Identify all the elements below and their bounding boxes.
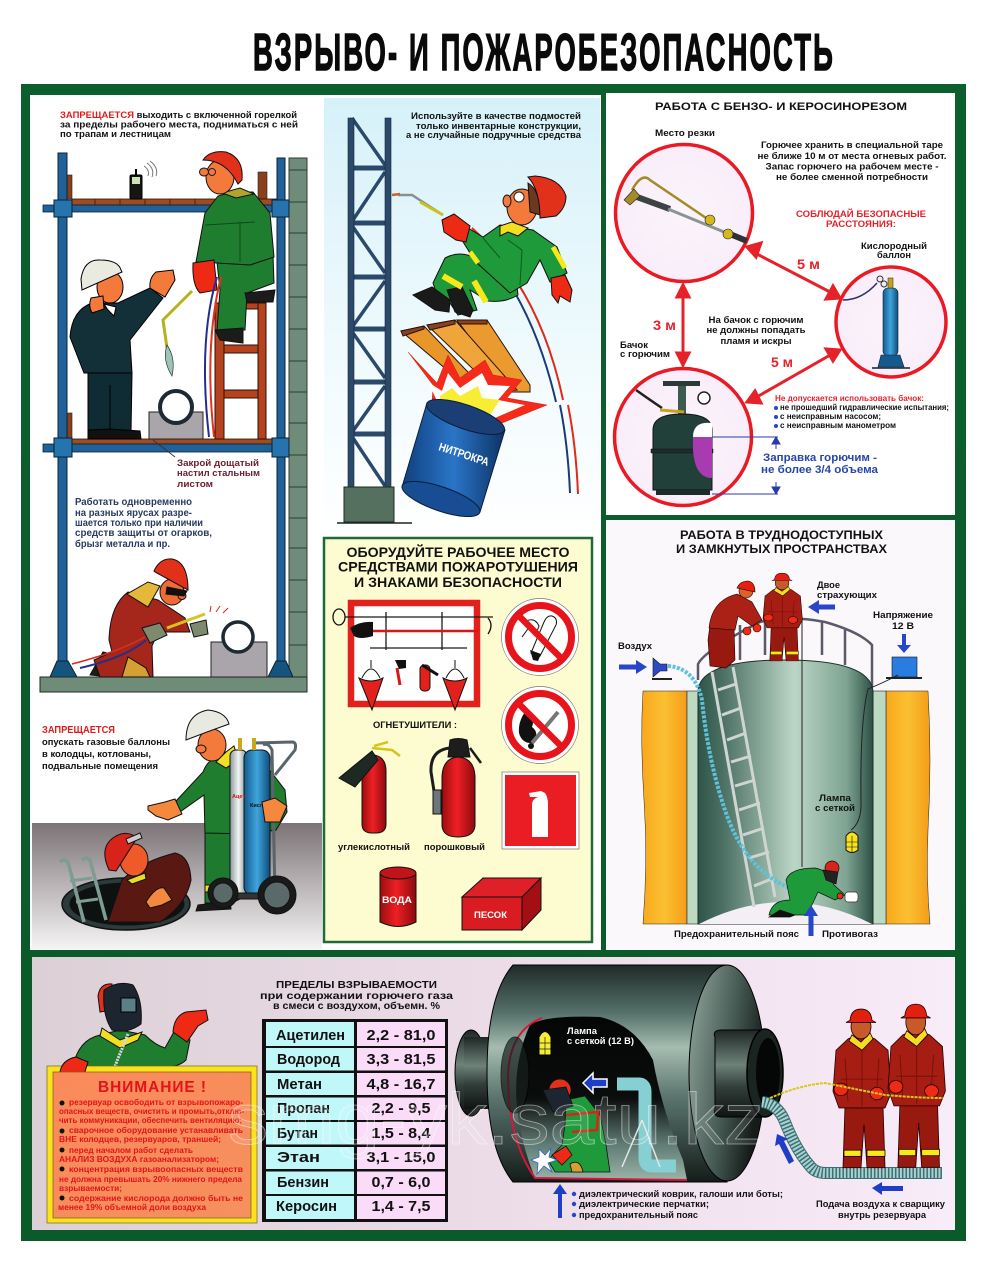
lattice tower bbox=[337, 118, 412, 523]
deck note: листом bbox=[177, 479, 213, 490]
label: fuel tank: с горючим bbox=[620, 349, 670, 359]
text: fuel storage: Запас горючего на рабочем месте - bbox=[766, 162, 938, 172]
horizontal tank bbox=[455, 965, 783, 1182]
lamp with grid bbox=[846, 832, 858, 852]
watermark: smg-yk.satu.kz bbox=[228, 1080, 764, 1160]
heading: РАБОТА В ТРУДНОДОСТУПНЫХ bbox=[680, 530, 883, 542]
label: air supply: внутрь резервуара bbox=[838, 1210, 927, 1220]
deck note bbox=[153, 440, 260, 490]
text: forbidden torch: ЗАПРЕЩАЕТСЯ выходить с включенной горелкой bbox=[60, 110, 297, 121]
block with pipe, kneeling bbox=[211, 622, 267, 677]
label: oxygen cylinder bbox=[861, 241, 927, 261]
two safety workers bbox=[708, 573, 802, 668]
PPE list bbox=[572, 1189, 783, 1220]
forbidden list bbox=[774, 394, 949, 430]
sign: fire extinguisher bbox=[502, 772, 579, 849]
labels: Воздух bbox=[618, 641, 652, 651]
air duct bbox=[762, 1102, 942, 1173]
text: fuel storage: не ближе 10 м от места огневых работ. bbox=[758, 151, 946, 162]
table: explosive limits: 1,4 - 7,5 bbox=[372, 1198, 430, 1215]
rope right worker bbox=[888, 1004, 945, 1167]
labels: Двое bbox=[817, 580, 840, 590]
label: lamp in tank bbox=[567, 1026, 634, 1046]
text: flames and sparks: пламя и искры bbox=[720, 336, 792, 347]
heading: И ЗАМКНУТЫХ ПРОСТРАНСТВАХ bbox=[676, 544, 887, 556]
safety rope bbox=[801, 620, 803, 867]
text: forbidden torch: за пределы рабочего места, подниматься с ней bbox=[60, 120, 298, 131]
text: fuel storage: Горючее хранить в специальной таре bbox=[761, 140, 943, 151]
rope left worker bbox=[833, 1009, 891, 1168]
table: explosive limits: 3,1 - 15,0 bbox=[366, 1149, 436, 1166]
kneeling welder bbox=[90, 559, 208, 677]
labels: Противогаз bbox=[822, 929, 879, 939]
table: explosive limits: 0,7 - 6,0 bbox=[372, 1174, 430, 1191]
labels: Напряжение bbox=[873, 610, 933, 620]
icon: mobile phone bbox=[130, 161, 157, 199]
table heading bbox=[260, 980, 454, 1012]
explosion flash bbox=[408, 352, 547, 423]
table: explosive limits: Керосин bbox=[276, 1198, 337, 1215]
barrel nitro paint: НИТРОКРА bbox=[437, 441, 490, 469]
soil bbox=[642, 691, 930, 924]
warning text: не должна превышать 20% нижнего предела bbox=[59, 1175, 243, 1184]
table: explosive limits: Этан bbox=[277, 1149, 320, 1166]
worker on ladder bbox=[193, 152, 275, 343]
text: forbidden cylinders bbox=[42, 725, 170, 772]
label: air supply bbox=[816, 1199, 945, 1220]
text: simultaneous work: средств защиты от огарков, bbox=[75, 528, 212, 539]
water barrel bbox=[380, 867, 416, 926]
table: explosive limits: Метан bbox=[277, 1076, 322, 1093]
label: fuel tank bbox=[620, 340, 670, 359]
circle: cutter torch bbox=[616, 144, 752, 282]
blue note: refuelling: не более 3/4 объема bbox=[761, 464, 879, 476]
table: explosive limits: Бензин bbox=[277, 1174, 329, 1191]
heading: ОБОРУДУЙТЕ РАБОЧЕЕ МЕСТО bbox=[346, 543, 570, 560]
barrel nitro paint bbox=[398, 392, 508, 524]
wooden planks bbox=[401, 320, 530, 392]
ladder bbox=[215, 303, 266, 439]
panel: improvised scaffolding bbox=[324, 98, 600, 535]
labels: Лампа bbox=[819, 793, 852, 803]
warning text bbox=[58, 1098, 244, 1212]
scaffold frame bbox=[40, 153, 307, 692]
worker standing bbox=[763, 573, 802, 661]
distance labels bbox=[653, 256, 820, 370]
manhole with worker bbox=[60, 833, 191, 930]
fill level marker bbox=[712, 437, 780, 494]
labels bbox=[618, 580, 933, 939]
labels: Предохранительный пояс bbox=[674, 929, 799, 939]
label: extinguishers: ОГНЕТУШИТЕЛИ : bbox=[373, 720, 457, 731]
hoses in the air bbox=[465, 228, 578, 494]
deck note: Закрой дощатый bbox=[177, 458, 259, 469]
ladder in tank bbox=[712, 667, 775, 907]
label: air supply: Подача воздуха к сварщику bbox=[816, 1199, 945, 1209]
text: use inventory constructions: а не случайные подручные средства bbox=[406, 130, 582, 141]
heading bbox=[676, 530, 887, 556]
cutting torch and hoses, kneeling bbox=[72, 606, 228, 668]
text: use inventory constructions: только инвентарные конструкции, bbox=[416, 121, 581, 132]
worker with gas cylinders: Ацет bbox=[232, 794, 245, 800]
two workers with rope bbox=[770, 1004, 945, 1168]
table: explosive limits: Водород bbox=[277, 1051, 340, 1068]
blue arrows in tank scene bbox=[553, 1134, 903, 1218]
text: simultaneous work: брызг металла и пр. bbox=[75, 538, 170, 550]
labels: страхующих bbox=[817, 590, 877, 600]
table: explosive limits: 3,3 - 81,5 bbox=[366, 1051, 436, 1068]
welder in tank bbox=[531, 1079, 610, 1174]
water barrel: ВОДА bbox=[382, 895, 412, 906]
welder with mask bbox=[60, 983, 208, 1075]
distance labels: 5 м bbox=[771, 354, 793, 370]
tripod bbox=[622, 1120, 660, 1167]
text: simultaneous work bbox=[75, 496, 212, 550]
text: forbidden cylinders: подвальные помещения bbox=[42, 761, 158, 772]
air pipe in tank bbox=[617, 1084, 676, 1166]
extinguisher labels bbox=[338, 842, 485, 852]
warning text: взрываемости; bbox=[59, 1184, 122, 1193]
forbidden list: Не допускается использовать бачок: bbox=[775, 394, 924, 403]
railing back bbox=[698, 618, 872, 687]
text: fuel storage bbox=[758, 140, 946, 183]
table: explosive limits: Пропан bbox=[277, 1100, 330, 1117]
text: simultaneous work: Работать одновременно bbox=[75, 496, 192, 508]
table: explosive limits: 1,5 - 8,4 bbox=[372, 1125, 431, 1142]
deck note: настил стальным bbox=[177, 468, 260, 479]
floor gradient bbox=[32, 823, 322, 950]
rope bbox=[770, 1083, 943, 1098]
warning box: ВНИМАНИЕ ! bbox=[98, 1079, 207, 1096]
burning torch with hoses bbox=[163, 277, 221, 437]
welding torch, falling bbox=[392, 194, 443, 215]
man in suit bbox=[70, 260, 175, 439]
tank shaft bbox=[698, 660, 873, 924]
blue arrows bbox=[619, 600, 911, 936]
panel: confined spaces bbox=[606, 520, 955, 950]
PPE list: диэлектрические перчатки; bbox=[579, 1199, 709, 1209]
warning text: АНАЛИЗ ВОЗДУХА газоанализатором; bbox=[59, 1155, 219, 1164]
warning text: опасных веществ, очистить и промыть,отклю- bbox=[59, 1107, 244, 1116]
panel: limits and tank welding bbox=[32, 957, 955, 1230]
PPE list: предохранительный пояс bbox=[579, 1210, 698, 1220]
icon: CO2 extinguisher bbox=[339, 742, 400, 833]
worker with gas cylinders bbox=[148, 710, 296, 914]
blue note: refuelling bbox=[761, 452, 879, 476]
table: explosive limits bbox=[262, 1019, 448, 1222]
label: lamp in tank: с сеткой (12 В) bbox=[567, 1036, 634, 1046]
red note: safe distances: РАССТОЯНИЯ: bbox=[826, 219, 896, 230]
text: flames and sparks bbox=[706, 315, 806, 347]
table: explosive limits: Ацетилен bbox=[276, 1027, 345, 1044]
sand box: ПЕСОК bbox=[474, 910, 507, 921]
warning text: перед началом работ сделать bbox=[69, 1146, 193, 1155]
warning text: содержание кислорода должно быть не bbox=[69, 1194, 244, 1203]
distance labels: 3 м bbox=[653, 317, 676, 333]
heading: И ЗНАКАМИ БЕЗОПАСНОСТИ bbox=[354, 574, 562, 590]
text: simultaneous work: на разных ярусах разре- bbox=[75, 508, 192, 519]
distance labels: 5 м bbox=[797, 256, 820, 272]
PPE list: диэлектрический коврик, галоши или боты; bbox=[579, 1189, 783, 1199]
label: fuel tank: Бачок bbox=[620, 340, 649, 350]
heading: СРЕДСТВАМИ ПОЖАРОТУШЕНИЯ bbox=[338, 558, 578, 574]
table heading: ПРЕДЕЛЫ ВЗРЫВАЕМОСТИ bbox=[276, 980, 437, 991]
label: oxygen cylinder: баллон bbox=[877, 250, 911, 261]
warning text: резервуар освободить от взрывопожаро- bbox=[69, 1098, 243, 1107]
text: simultaneous work: шается только при наличии bbox=[75, 518, 203, 529]
text: forbidden torch bbox=[60, 110, 298, 140]
table heading: в смеси с воздухом, объемн. % bbox=[273, 1000, 440, 1012]
text: forbidden cylinders: в колодцы, котлованы, bbox=[42, 749, 151, 760]
warning text: чить коммуникации, обеспечить вентиляцию; bbox=[59, 1116, 242, 1125]
panel: fire-fighting equipment bbox=[324, 538, 592, 942]
label: lamp in tank: Лампа bbox=[567, 1026, 598, 1036]
warning text: менее 19% объемной доли воздуха bbox=[58, 1203, 207, 1212]
warning text: сварочное оборудование устанавливать bbox=[69, 1126, 243, 1135]
table: explosive limits: 2,2 - 81,0 bbox=[366, 1027, 436, 1044]
heading: РАБОТА С БЕНЗО- И КЕРОСИНОРЕЗОМ bbox=[655, 101, 907, 113]
worker bending bbox=[708, 581, 762, 668]
heading bbox=[338, 543, 578, 590]
power source bbox=[851, 657, 922, 830]
air hose bbox=[668, 666, 790, 888]
label: cutting spot: Место резки bbox=[655, 128, 715, 138]
sand box bbox=[462, 878, 541, 930]
forbidden list: с неисправным насосом; bbox=[780, 412, 881, 421]
text: flames and sparks: На бачок с горючим bbox=[708, 315, 804, 326]
labels: 12 В bbox=[892, 621, 915, 631]
table: explosive limits: 2,2 - 9,5 bbox=[372, 1100, 430, 1117]
text: forbidden cylinders: ЗАПРЕЩАЕТСЯ bbox=[42, 725, 115, 736]
circle: fuel tank bbox=[614, 368, 752, 506]
tank cutaway bbox=[501, 1017, 687, 1180]
warning text: ВНЕ колодцев, резервуаров, траншей; bbox=[59, 1135, 221, 1144]
distance arrows bbox=[677, 243, 840, 403]
extinguisher labels: порошковый bbox=[424, 842, 485, 852]
text: forbidden torch: по трапам и лестницам bbox=[60, 129, 171, 140]
falling worker bbox=[413, 176, 572, 317]
text: use inventory constructions: Используйте в качестве подмостей bbox=[411, 111, 581, 122]
red note: safe distances bbox=[796, 208, 926, 230]
kneeling worker in tank bbox=[769, 861, 858, 917]
table: explosive limits: Бутан bbox=[277, 1125, 318, 1142]
sign: no smoking bbox=[502, 598, 578, 676]
blue note: refuelling: Заправка горючим - bbox=[763, 452, 877, 464]
text: flames and sparks: не должны попадать bbox=[706, 325, 806, 336]
icon: powder extinguisher bbox=[431, 738, 481, 837]
labels: с сеткой bbox=[815, 803, 855, 813]
panel: scaffold and manhole rules bbox=[30, 95, 601, 950]
forbidden list: с неисправным манометром bbox=[780, 421, 896, 430]
text: use inventory constructions bbox=[406, 111, 582, 141]
worker with gas cylinders: Кисл bbox=[250, 803, 264, 809]
circle: oxygen cylinder bbox=[836, 267, 946, 377]
sign: no open flame bbox=[502, 686, 578, 764]
extinguisher labels: углекислотный bbox=[338, 842, 410, 852]
pipe on block bbox=[149, 391, 203, 439]
tank floor bbox=[699, 902, 872, 924]
text: forbidden cylinders: опускать газовые баллоны bbox=[42, 737, 170, 748]
text: fuel storage: не более сменной потребности bbox=[776, 172, 928, 183]
label: oxygen cylinder: Кислородный bbox=[861, 241, 927, 252]
panel: gasoline and kerosene cutter bbox=[606, 93, 955, 515]
arrow inside tank bbox=[583, 1073, 607, 1093]
warning text: концентрация взрывоопасных веществ bbox=[69, 1165, 243, 1174]
table heading: при содержании горючего газа bbox=[260, 991, 454, 1002]
forbidden list: не прошедший гидравлические испытания; bbox=[780, 403, 949, 412]
table: explosive limits: 4,8 - 16,7 bbox=[366, 1076, 436, 1093]
warning box bbox=[47, 1057, 257, 1223]
blower bbox=[652, 658, 672, 679]
fire board bbox=[333, 603, 493, 710]
brick wall bbox=[289, 158, 307, 678]
red note: safe distances: СОБЛЮДАЙ БЕЗОПАСНЫЕ bbox=[796, 208, 926, 220]
lamp in tank bbox=[539, 1032, 551, 1055]
